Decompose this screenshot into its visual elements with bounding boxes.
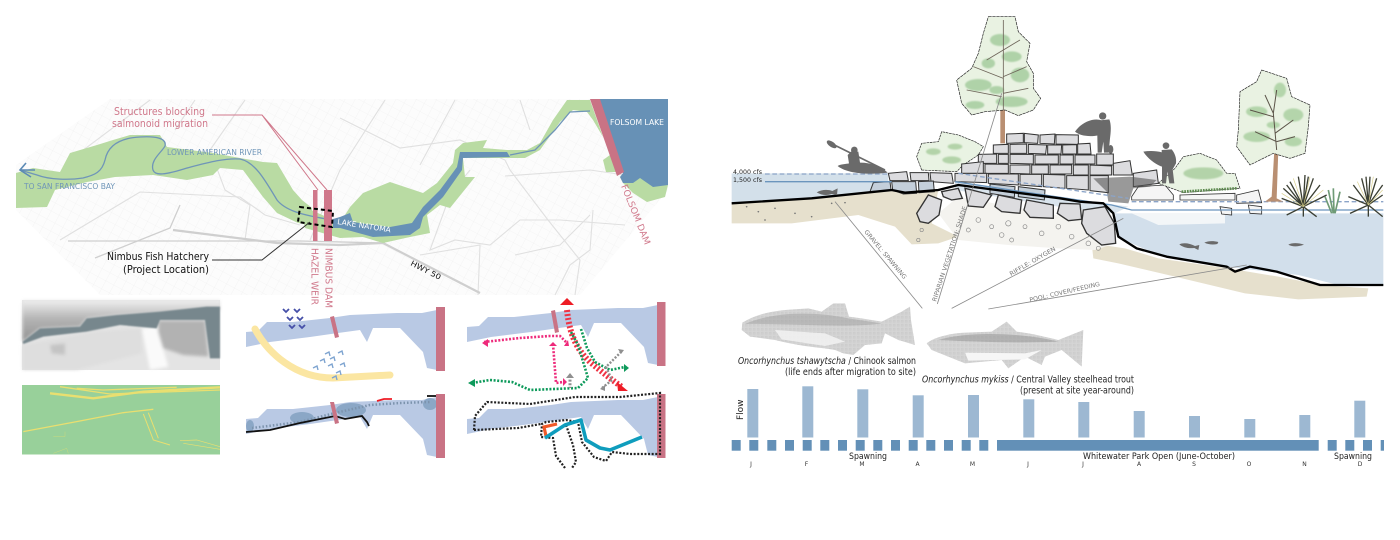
green dotted path upper bbox=[581, 329, 625, 370]
month labels: O bbox=[1247, 461, 1252, 468]
pink dotted paths bbox=[484, 336, 567, 343]
highways bbox=[68, 205, 480, 293]
navy birds bbox=[283, 309, 305, 328]
label: pool: POOL: COVER/FEEDING bbox=[1029, 281, 1101, 304]
fish left in river bbox=[817, 188, 838, 195]
leader line to hatchery bbox=[212, 222, 310, 260]
kayaker silhouette bbox=[825, 139, 888, 174]
chinook salmon illustration bbox=[742, 303, 915, 355]
upper black line bbox=[427, 395, 436, 397]
month labels bbox=[749, 461, 1363, 468]
ground line bbox=[732, 185, 1383, 285]
foundation boulders bbox=[917, 188, 1116, 245]
4000 cfs level bbox=[765, 173, 1383, 202]
arrow to bay bbox=[20, 163, 35, 177]
yellow arc bbox=[255, 329, 390, 378]
label: hazel weir: HAZEL WEIR bbox=[308, 248, 320, 305]
fifth row bbox=[955, 170, 1158, 193]
green dotted path lower bbox=[472, 332, 588, 390]
rock wall bbox=[870, 133, 1262, 245]
panel: bird habitat diagram bbox=[246, 307, 445, 380]
fish in pool bbox=[1179, 241, 1304, 250]
month labels: F bbox=[805, 461, 809, 468]
folsom dam bar bbox=[590, 99, 624, 176]
month labels: J bbox=[749, 461, 752, 468]
top row bbox=[1007, 133, 1078, 144]
label: folsom lake: FOLSOM LAKE bbox=[610, 118, 664, 127]
left river water bbox=[732, 173, 888, 203]
gravel dots bbox=[917, 218, 1100, 250]
river rocks in water bbox=[870, 181, 1045, 200]
riparian plant two bbox=[1348, 177, 1383, 217]
chinook caption: (life ends after migration to site) bbox=[785, 367, 916, 378]
label: riffle: RIFFLE: OXYGEN bbox=[1008, 246, 1057, 278]
label: to san francisco bay: TO SAN FRANCISCO BAY bbox=[23, 182, 115, 191]
month labels: J bbox=[1081, 461, 1084, 468]
river shape bbox=[246, 310, 437, 370]
month labels: N bbox=[1302, 461, 1307, 468]
month labels: J bbox=[1026, 461, 1029, 468]
panel: elevation model bbox=[22, 300, 220, 370]
nimbus dam bar bbox=[324, 190, 332, 241]
label: nimbus fish hatchery: (Project Location) bbox=[123, 264, 209, 276]
standing figure with board bbox=[1075, 112, 1113, 154]
steelhead caption: (present at site year-around) bbox=[1020, 386, 1134, 396]
second row bbox=[993, 143, 1091, 154]
dam bar bbox=[436, 307, 445, 371]
month labels: M bbox=[970, 461, 975, 468]
dark shadow in rock wall bbox=[1093, 177, 1157, 203]
panel: slope analysis bbox=[22, 385, 220, 454]
river shape bbox=[467, 397, 658, 457]
light blue birds bbox=[313, 351, 345, 380]
tree right bbox=[1237, 70, 1310, 202]
red arrow bbox=[560, 298, 628, 391]
label: nimbus dam: NIMBUS DAM bbox=[322, 248, 334, 308]
label: lake natoma: LAKE NATOMA bbox=[337, 217, 392, 235]
tree left bbox=[957, 17, 1041, 143]
teal path bbox=[545, 420, 642, 450]
weir bar bbox=[330, 316, 339, 338]
sand dots bbox=[746, 202, 846, 221]
shrub right bbox=[1158, 153, 1240, 193]
label: hwy 50: HWY 50 bbox=[409, 259, 443, 282]
lower american river line bbox=[20, 137, 333, 220]
dam bar bbox=[436, 394, 445, 458]
label: 4000 cfs: 4,000 cfs bbox=[733, 168, 763, 176]
panel: channel and pools diagram bbox=[246, 394, 445, 458]
label: structures blocking: salmonoid migration bbox=[112, 118, 208, 130]
green folsom patch bbox=[603, 155, 668, 202]
shrub left bbox=[917, 132, 983, 172]
river shape bbox=[246, 397, 437, 457]
folsom lake bbox=[598, 99, 668, 187]
steelhead trout illustration bbox=[927, 322, 1083, 368]
label: nimbus fish hatchery: Nimbus Fish Hatchery bbox=[107, 251, 209, 263]
flow chart bbox=[732, 386, 1384, 468]
green river corridor west bbox=[16, 135, 312, 225]
whitewater park label: Whitewater Park Open (June-October) bbox=[1083, 452, 1235, 462]
month labels: A bbox=[1137, 461, 1142, 468]
label: gravel: GRAVEL: SPAWNING bbox=[862, 229, 908, 281]
weir bar bbox=[330, 402, 339, 424]
leader lines to structures bbox=[212, 115, 327, 190]
month labels: S bbox=[1192, 461, 1196, 468]
project boundary dotted bbox=[474, 393, 660, 468]
surfer with board bbox=[1143, 142, 1176, 183]
shrub left shading bbox=[926, 144, 962, 164]
panel: fish and boater circulation diagram bbox=[467, 298, 666, 391]
water level lines bbox=[765, 173, 1383, 210]
weir bar bbox=[551, 310, 559, 333]
riparian plant one bbox=[1282, 175, 1327, 217]
regional map bbox=[16, 99, 668, 308]
channel water over rocks bbox=[955, 182, 1128, 213]
lake natoma bbox=[333, 152, 510, 237]
flow axis label: Flow bbox=[736, 399, 746, 420]
river rocks above water bbox=[888, 172, 953, 183]
callout lines bbox=[835, 93, 1247, 309]
dam bar bbox=[657, 302, 666, 366]
river shape bbox=[467, 305, 658, 365]
green arrowheads bbox=[468, 364, 629, 387]
orange mark bbox=[544, 424, 557, 436]
right pool water bbox=[1115, 213, 1383, 285]
label: structures blocking: Structures blocking bbox=[114, 106, 205, 118]
monthly flow bars bbox=[747, 386, 1365, 438]
map street background bbox=[16, 99, 668, 295]
1500 cfs level bbox=[765, 182, 1383, 210]
pink arrowheads bbox=[482, 339, 569, 386]
green river corridor east bbox=[300, 100, 603, 243]
hazel weir bar bbox=[313, 190, 318, 241]
steelhead caption: Oncorhynchus mykiss / Central Valley steelhead trout bbox=[922, 374, 1160, 386]
red line bbox=[377, 399, 392, 401]
black bank line bbox=[246, 416, 369, 432]
fourth row bbox=[962, 161, 1132, 175]
month labels: A bbox=[915, 461, 920, 468]
river in elevation model bbox=[23, 307, 220, 358]
panel: project boundary diagram bbox=[467, 393, 666, 468]
grey dotted paths bbox=[602, 351, 622, 388]
label: lower american river: LOWER AMERICAN RIVER bbox=[167, 148, 262, 157]
major roads bbox=[60, 100, 625, 295]
spawning label left: Spawning bbox=[849, 452, 887, 462]
season timeline strip bbox=[732, 440, 1384, 451]
label: riparian vegetation: RIPARIAN VEGETATION: SHADE bbox=[931, 205, 969, 303]
dam bar bbox=[657, 394, 666, 458]
third row bbox=[978, 154, 1113, 165]
upper river line bbox=[510, 111, 590, 155]
spawning label right: Spawning bbox=[1334, 452, 1372, 462]
label: folsom dam: FOLSOM DAM bbox=[618, 183, 651, 246]
pools bbox=[246, 398, 437, 432]
project location marker bbox=[298, 207, 333, 227]
month labels: M bbox=[859, 461, 865, 468]
label: 1500 cfs: 1,500 cfs bbox=[733, 176, 763, 184]
right bank stones bbox=[1132, 185, 1262, 215]
riparian grass bbox=[1325, 188, 1340, 213]
section illustration bbox=[732, 17, 1383, 309]
dotted riffle line bbox=[252, 402, 430, 428]
sand bed bbox=[732, 190, 958, 244]
month labels: D bbox=[1358, 461, 1363, 468]
gravel bed bbox=[938, 197, 1115, 250]
chinook caption: Oncorhynchus tshawytscha / Chinook salmon bbox=[738, 356, 931, 367]
